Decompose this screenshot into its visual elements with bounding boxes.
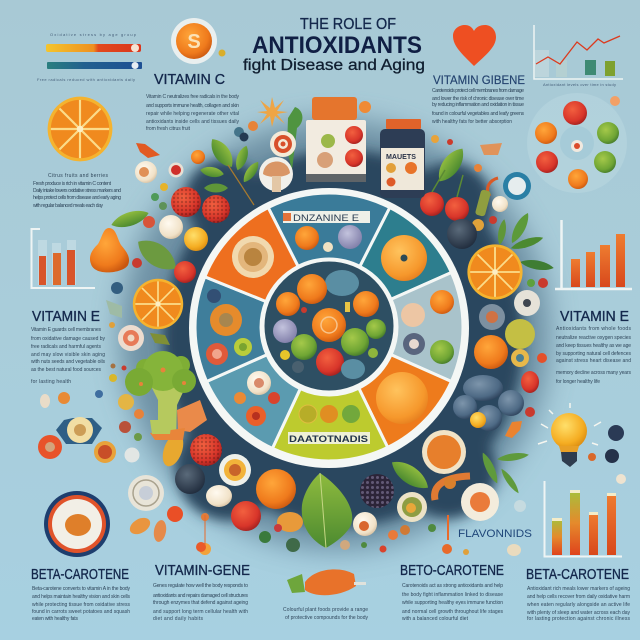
icon: leaf branch xyxy=(199,135,262,205)
icon: cream orange slice xyxy=(422,430,466,474)
panel: left blue xyxy=(195,277,267,382)
text block: left under orange: with regular balanced meals each day xyxy=(33,203,103,209)
icon: orange curl xyxy=(435,476,470,500)
icon: branch leaves xyxy=(479,451,529,495)
text block: left under orange: Daily intake lowers oxidative stress markers and xyxy=(33,188,121,194)
text block: vitamin C: repair while helping regenerate other vital xyxy=(146,111,239,117)
icon: raspberries xyxy=(171,187,230,223)
icon: cream ring xyxy=(514,290,540,316)
wheel centre xyxy=(263,260,395,392)
panel: lower left blue xyxy=(207,355,300,448)
icon: swirl xyxy=(118,325,144,351)
icon: mushroom xyxy=(259,157,293,192)
heading: vitamin E right: VITAMIN E xyxy=(560,308,629,325)
text block: vitamin gene: found in colourful vegetables and leafy greens xyxy=(432,111,524,117)
panel: right grey xyxy=(391,272,463,382)
foods: lower right cluster xyxy=(302,412,529,552)
icon: yellow green fruit xyxy=(505,319,535,349)
icon: blueberries xyxy=(453,375,524,431)
title xyxy=(243,16,425,74)
icon: vitamin C badge xyxy=(171,18,226,64)
text block: vitamin gene lower xyxy=(153,583,248,622)
icon: red dot xyxy=(167,506,183,522)
icon: dark leaf xyxy=(132,233,182,277)
jar: dark bottle xyxy=(380,119,425,198)
icon: herb xyxy=(287,107,302,170)
text block: vitamin gene lower: antioxidants and repairs damaged cell structures xyxy=(153,593,248,599)
text block: vitamin C: antioxidants inside cells and tissues daily xyxy=(146,119,240,125)
icon: blackberry xyxy=(360,474,394,508)
icon: heart xyxy=(453,25,496,66)
text block: beta-carotene right xyxy=(527,586,630,622)
text block: vitamin gene: by reducing inflammation and oxidation in tissue xyxy=(432,102,524,108)
upper left panel content xyxy=(232,236,274,278)
heading: vitamin E left: VITAMIN E xyxy=(32,308,100,325)
icon: green leaf xyxy=(387,455,433,495)
text block: beta-carotene left xyxy=(32,586,130,622)
icon: small garnish right xyxy=(359,101,502,231)
icon: cream ball xyxy=(206,485,232,507)
icon: large leaf xyxy=(433,144,469,186)
vitamin E right chart xyxy=(555,220,632,289)
icon: light bulb xyxy=(538,403,601,467)
text block: vitamin E left: free radicals and harmful agents xyxy=(31,344,102,350)
icon: motif blue hexagon xyxy=(38,417,142,463)
text block: beta-carotene right: with plenty of sleep and water across each day xyxy=(527,610,630,616)
left panel content xyxy=(206,289,252,365)
heading: vitamin gene lower: VITAMIN-GENE xyxy=(155,562,250,579)
panel: top xyxy=(268,193,390,266)
text block: beta-carotene centre: and normal cell growth throughout life stages xyxy=(402,609,504,615)
text block: vitamin E right: neutralize reactive oxygen species xyxy=(556,335,632,341)
text block: vitamin gene lower: Genes regulate how well the body responds to xyxy=(153,583,248,589)
text block: vitamin E left: as the best natural food sources xyxy=(31,367,102,373)
icon: ring xyxy=(128,475,164,511)
text block: beta-carotene centre: while supporting healthy eyes immune function xyxy=(402,600,503,606)
icon: cream small xyxy=(353,512,377,536)
text block: beta-carotene right: Antioxidant rich meals lower markers of ageing xyxy=(527,586,630,592)
text block: beta-carotene right: and help cells recover from daily oxidative harm xyxy=(527,594,630,600)
icon: cherries xyxy=(420,170,469,221)
icon: cream orange round xyxy=(461,483,499,521)
top panel content xyxy=(283,211,370,252)
text block: vitamin E left: Vitamin E guards cell membranes xyxy=(31,327,102,333)
top panel content: DNZANINE E xyxy=(293,213,359,223)
text block: vitamin E left: from oxidative damage caused by xyxy=(31,336,106,342)
chart: top left progress bars xyxy=(37,32,142,82)
lower left panel content xyxy=(234,371,280,426)
wheel xyxy=(189,188,469,468)
icon: blue ring xyxy=(503,172,531,200)
icon: orange slice right xyxy=(467,244,523,300)
text block: vitamin E right: for longer healthy life xyxy=(556,379,600,385)
chart: top left progress bars: Free radicals reduced with antioxidants daily xyxy=(37,77,135,82)
icon: flower xyxy=(257,97,288,127)
text block: beta-carotene right: when eaten regularly alongside an active life xyxy=(527,602,630,608)
text block: vitamin gene lower: through enzymes that defend against ageing xyxy=(153,600,248,606)
chart: line and bars xyxy=(534,25,623,87)
text block: vitamin gene xyxy=(432,88,524,125)
chart: top left progress bars: Oxidative stress by age group xyxy=(50,32,137,37)
text block: vitamin C xyxy=(146,94,240,132)
text block: centre bottom: of protective compounds for the body xyxy=(285,615,368,621)
icon: dark ball xyxy=(447,219,477,249)
foods: lower left cluster xyxy=(38,417,303,557)
text block: centre bottom: Colourful plant foods provide a range xyxy=(283,607,368,613)
heading: beta-carotene centre: BETO-CAROTENE xyxy=(400,562,504,579)
icon: red ball xyxy=(231,501,261,531)
icon: small garnish lower right xyxy=(340,412,522,552)
text block: centre bottom xyxy=(283,607,368,621)
text block: vitamin C: from fresh citrus fruit xyxy=(146,126,191,132)
soft halo around food xyxy=(120,120,550,550)
icon: orange slice piece xyxy=(259,512,303,552)
icon: cream ball xyxy=(492,196,508,212)
text block: left under orange: helps protect cells from disease and early aging xyxy=(33,195,121,201)
icon: red apple xyxy=(174,261,196,283)
icon: beta target xyxy=(44,491,110,557)
panel: bottom yellow xyxy=(272,388,388,461)
grey panel content xyxy=(401,290,454,364)
text block: beta-carotene left: and helps maintain healthy vision and skin cells xyxy=(32,594,130,600)
icon: small garnish xyxy=(135,121,258,210)
icon: target food lower xyxy=(219,454,251,486)
text block: vitamin gene: and lower the risk of chronic disease over time xyxy=(432,96,524,102)
dark food backdrop xyxy=(163,150,523,526)
icon: swirl right xyxy=(479,304,505,330)
text block: vitamin E right: Antioxidants from whole foods xyxy=(556,326,632,332)
text block: left under orange: Fresh produce is rich in vitamin C content xyxy=(33,181,112,187)
icon: carrot pieces xyxy=(127,513,211,555)
text block: vitamin C: Vitamin C neutralizes free radicals in the body xyxy=(146,94,240,100)
foods: left cluster xyxy=(40,207,208,440)
heading: beta-carotene left: BETA-CAROTENE xyxy=(31,566,129,583)
yellow panel content: DAATOTNADIS xyxy=(289,434,368,445)
text block: left under orange xyxy=(33,173,121,209)
vitamin E left chart xyxy=(32,229,95,288)
text block: vitamin gene lower: and support long term cellular health with xyxy=(153,609,248,615)
text block: beta-carotene centre: the body fight inflammation linked to disease xyxy=(402,592,503,598)
text block: vitamin E left: for lasting health xyxy=(31,379,71,385)
text block: vitamin gene lower: diet and daily habits xyxy=(153,616,204,622)
text block: vitamin E right: memory decline across many years xyxy=(556,370,632,376)
chart: lower right bars xyxy=(544,481,622,556)
text block: beta-carotene centre: Carotenoids act as strong antioxidants and help xyxy=(402,583,503,589)
foods: top left cluster xyxy=(135,97,302,223)
orange panel content xyxy=(376,372,428,424)
icon: blueberries xyxy=(588,425,626,484)
icon: target food xyxy=(270,131,296,157)
icon: orange carrot xyxy=(287,569,366,595)
diagram: right circular wheel xyxy=(527,93,627,193)
title: fight Disease and Aging xyxy=(243,57,425,74)
icon: small yellow ring xyxy=(511,349,529,367)
icon: pear xyxy=(90,207,151,272)
icon: cream balls xyxy=(143,215,208,251)
text block: beta-carotene left: found in carrots sweet potatoes and squash xyxy=(32,609,130,615)
icon: orange slice left xyxy=(133,279,183,329)
text block: beta-carotene right: for lasting protection against chronic illness xyxy=(527,616,630,622)
text block: beta-carotene left: while protecting tissue from oxidative stress xyxy=(32,602,130,608)
foods: right cluster xyxy=(447,211,555,431)
text block: beta-carotene left: Beta-carotene converts to vitamin A in the body xyxy=(32,586,130,592)
icon: leaves xyxy=(496,211,555,272)
panel: lower right orange xyxy=(359,355,451,447)
text block: vitamin C: and supports immune health, collagen and skin xyxy=(146,103,239,109)
text block: left under orange: Citrus fruits and berries xyxy=(48,173,108,179)
icon: salmon xyxy=(177,400,207,432)
icon: vitamin C badge: S xyxy=(187,31,201,53)
title: THE ROLE OF xyxy=(300,16,396,33)
heading: vitamin C: VITAMIN C xyxy=(154,71,225,88)
text block: vitamin gene: with healthy fats for better absorption xyxy=(432,119,512,125)
icon: dark ball xyxy=(175,464,205,494)
text block: beta-carotene centre: with a balanced colourful diet xyxy=(402,616,469,622)
icon: yellow ring xyxy=(397,492,427,522)
icon: corn and salmon xyxy=(150,420,187,469)
text block: beta-carotene centre xyxy=(402,583,504,622)
icon: small garnish left xyxy=(106,258,170,382)
text block: vitamin E left: and may slow visible skin aging xyxy=(31,352,105,358)
teal panel content xyxy=(381,235,427,281)
panel: upper right teal xyxy=(360,208,451,299)
icon: orange ball right xyxy=(474,335,508,369)
text block: beta-carotene left: eaten with healthy fats xyxy=(32,616,78,622)
icon: small markers lower xyxy=(196,500,526,556)
text block: vitamin E right xyxy=(556,326,632,385)
text block: vitamin E right: against stress heart disease and xyxy=(556,358,631,364)
text block: vitamin E right: by supporting natural cell defences xyxy=(556,351,632,357)
chart: line and bars: Antioxidant levels over time in study xyxy=(543,82,616,87)
icon: broccoli xyxy=(125,351,196,440)
jar: dark bottle: MAUETS xyxy=(386,154,416,161)
jar: orange lid xyxy=(306,97,366,182)
heading: vitamin gene: VITAMIN GIBENE xyxy=(433,73,525,87)
title: ANTIOXIDANTS xyxy=(252,32,422,59)
icon: small fruits under broccoli xyxy=(40,390,144,419)
text block: vitamin gene: Carotenoids protect cell membranes from damage xyxy=(432,88,524,94)
icon: orange pumpkin xyxy=(256,469,296,509)
text block: vitamin E right: and keep tissues healthy as we age xyxy=(556,343,631,349)
text block: vitamin E left: with nuts seeds and vegetable oils xyxy=(31,359,106,365)
text block: vitamin E left xyxy=(31,327,106,385)
heading: flavonoids: FLAVONNIDS xyxy=(458,528,532,540)
wheel outer ring xyxy=(189,188,469,468)
icon: orange slice xyxy=(48,97,112,161)
icon: red fruit xyxy=(521,278,548,417)
icon: strawberry xyxy=(190,434,222,466)
panel: upper left orange xyxy=(205,208,298,302)
yellow panel content xyxy=(288,405,370,445)
foods: upper right cluster xyxy=(359,101,531,231)
icon: big leaf xyxy=(302,473,352,548)
